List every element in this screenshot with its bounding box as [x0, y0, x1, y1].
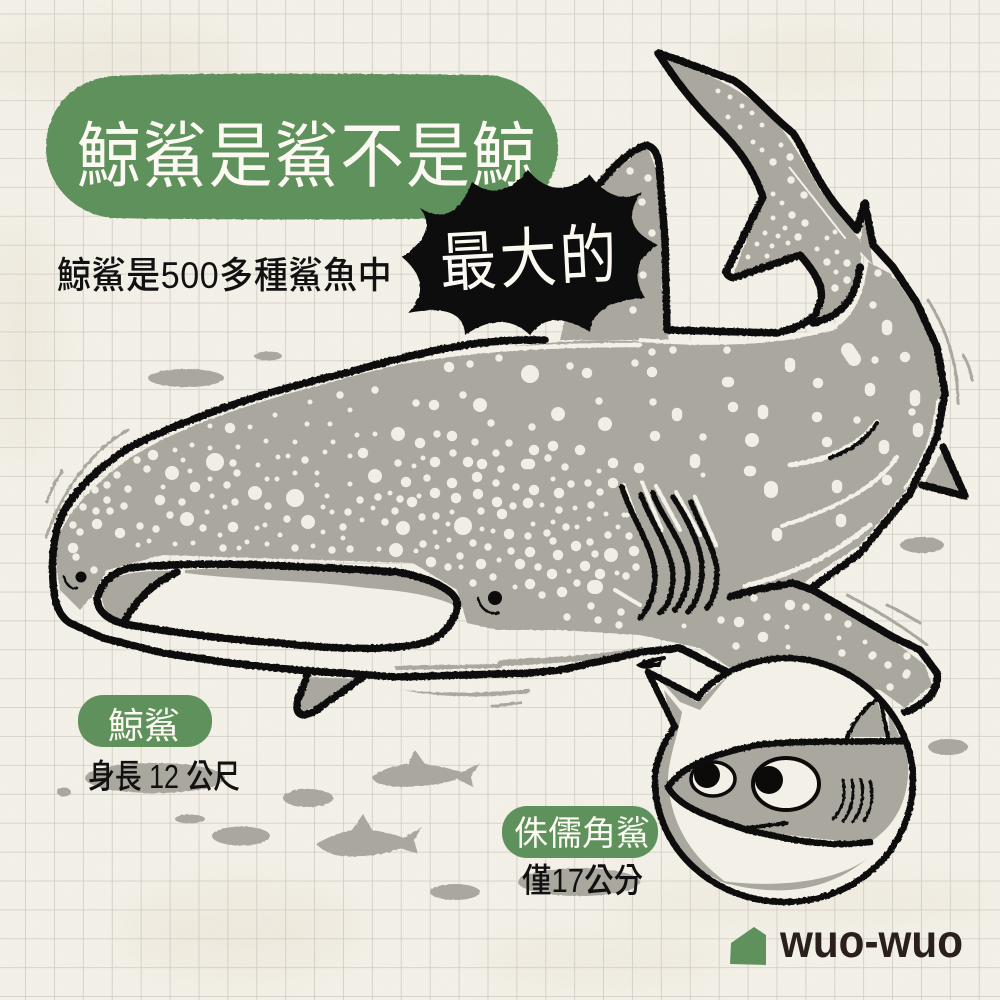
burst badge [402, 170, 658, 335]
fish silhouette 2 [316, 814, 422, 856]
magnifier circle: dwarf lantern shark [636, 658, 913, 902]
icon: house [730, 927, 766, 965]
outline: tail upper edge [658, 53, 945, 587]
outline: mouth [97, 564, 457, 648]
whale shark length [85, 758, 240, 795]
sea shadows: blobs and swimming fish [57, 352, 968, 900]
subtitle: 鯨鯊是500多種鯊魚中 [57, 256, 392, 296]
outline: belly fin [297, 673, 363, 714]
length text: 僅17公分 [522, 861, 643, 899]
label: dwarf lantern shark pill [502, 806, 658, 858]
brand text: wuo-wuo [779, 915, 963, 967]
badge text: 最大的 [438, 218, 621, 301]
small shark eyes [691, 762, 735, 796]
fish silhouette 1 [372, 750, 480, 787]
spots [73, 91, 918, 687]
label: whale shark pill [78, 695, 212, 747]
paper highlights [400, 168, 938, 605]
dwarf shark length [518, 861, 643, 899]
eyes [76, 572, 502, 605]
logo [730, 915, 963, 967]
outline: head and back [53, 340, 727, 677]
title pill [46, 74, 558, 220]
title text: 鯨鯊是鯊不是鯨 [77, 117, 538, 197]
small shark body [655, 674, 908, 890]
gills [622, 487, 717, 618]
back-of-body marks [644, 423, 877, 662]
left eye crease [64, 577, 499, 613]
shark fills: tail, dorsal fin, small fins, body [55, 59, 961, 712]
circle and shark outlines [648, 658, 913, 902]
label text: 鯨鯊 [108, 705, 180, 746]
whale shark illustration [53, 53, 965, 714]
mouth interior [97, 564, 457, 648]
motion lines [46, 300, 972, 668]
length text: 身長 12 公尺 [88, 758, 240, 795]
label text: 侏儒角鯊 [514, 815, 650, 853]
outline: dorsal fin [600, 53, 821, 333]
black crayon outlines [53, 53, 965, 714]
tiny black fish [636, 660, 662, 669]
outline: pectoral fin and tail base [730, 267, 937, 712]
